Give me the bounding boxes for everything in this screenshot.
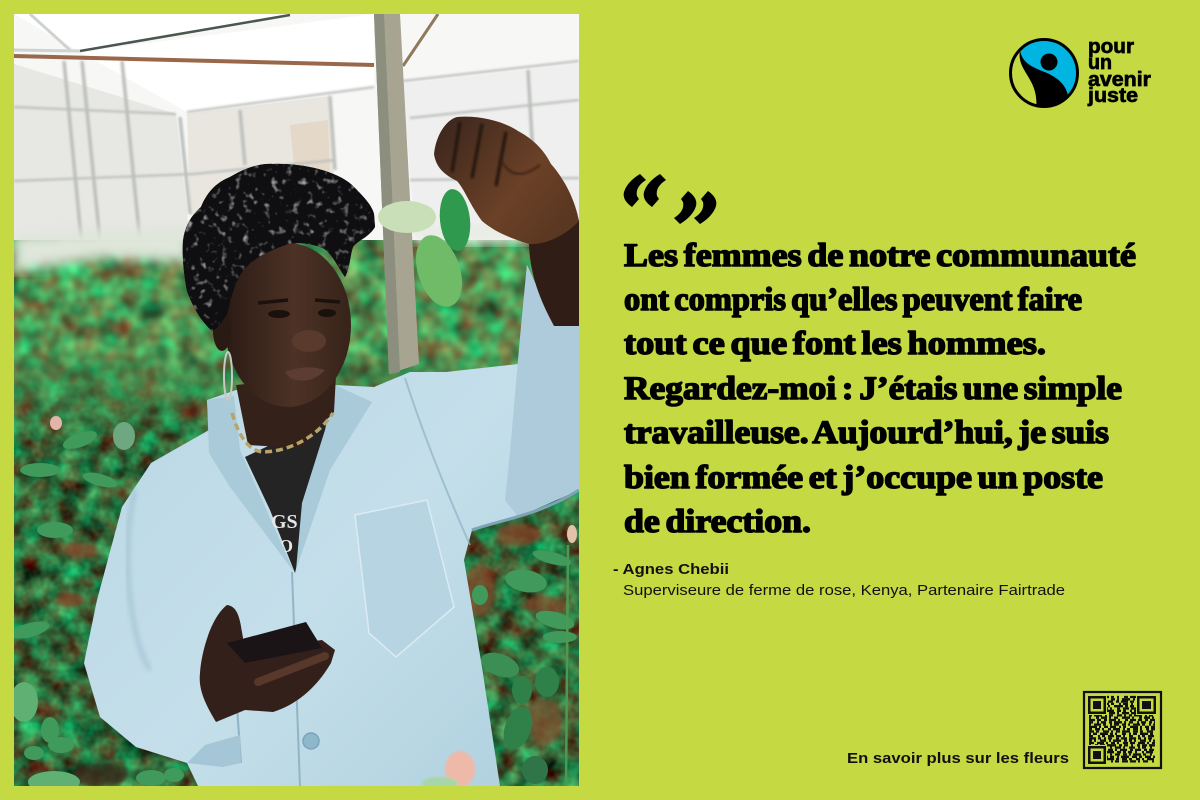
- icon: quotation marks: [624, 174, 716, 224]
- sharp foreground foliage: [9, 350, 579, 793]
- body: blue work coat: GS: [271, 511, 298, 533]
- coat buttons: [303, 733, 319, 749]
- face: [213, 243, 351, 407]
- quote text: travailleuse. Aujourd’hui, je suis: [624, 415, 1109, 451]
- body: blue work coat: O: [279, 536, 293, 556]
- logo: Fairtrade mark with tagline: [1005, 36, 1151, 110]
- tagline: [1087, 36, 1151, 107]
- quote text: Les femmes de notre communauté: [624, 238, 1136, 274]
- quote text: ont compris qu’elles peuvent faire: [624, 282, 1082, 318]
- pocket: [355, 500, 454, 657]
- QR code: [1084, 692, 1161, 768]
- icon: Fairtrade symbol: [1005, 38, 1078, 110]
- quote text: Regardez-moi : J’étais une simple: [624, 371, 1122, 407]
- quote text: bien formée et j’occupe un poste: [624, 460, 1103, 496]
- tagline: avenir: [1088, 69, 1151, 91]
- curly black hair: [183, 164, 375, 331]
- tagline: juste: [1087, 85, 1138, 107]
- tagline: pour: [1088, 36, 1134, 58]
- steel post: [374, 14, 419, 374]
- tagline: un: [1088, 52, 1112, 74]
- collar: [207, 396, 294, 572]
- photo: woman in a rose greenhouse: [9, 14, 579, 793]
- attribution: [613, 562, 1065, 599]
- raised arm and fist: [434, 117, 579, 326]
- quote text: tout ce que font les hommes.: [624, 326, 1046, 362]
- blurred rose foliage: [14, 224, 536, 440]
- held rose leaves: [378, 188, 473, 313]
- t-shirt: [245, 424, 326, 573]
- neck and necklace: [232, 375, 336, 452]
- QR finder squares: [1087, 695, 1157, 765]
- blurred rosebud: [422, 751, 475, 789]
- greenhouse background: [14, 14, 579, 264]
- call to action: En savoir plus sur les fleurs: [847, 750, 1069, 767]
- attribution: - Agnes Chebii: [613, 562, 729, 578]
- attribution: Superviseure de ferme de rose, Kenya, Partenaire Fairtrade: [623, 582, 1065, 599]
- quote text: [624, 238, 1136, 540]
- quote text: de direction.: [624, 504, 811, 540]
- hand with phone: [200, 605, 335, 722]
- body: blue work coat: [84, 265, 579, 786]
